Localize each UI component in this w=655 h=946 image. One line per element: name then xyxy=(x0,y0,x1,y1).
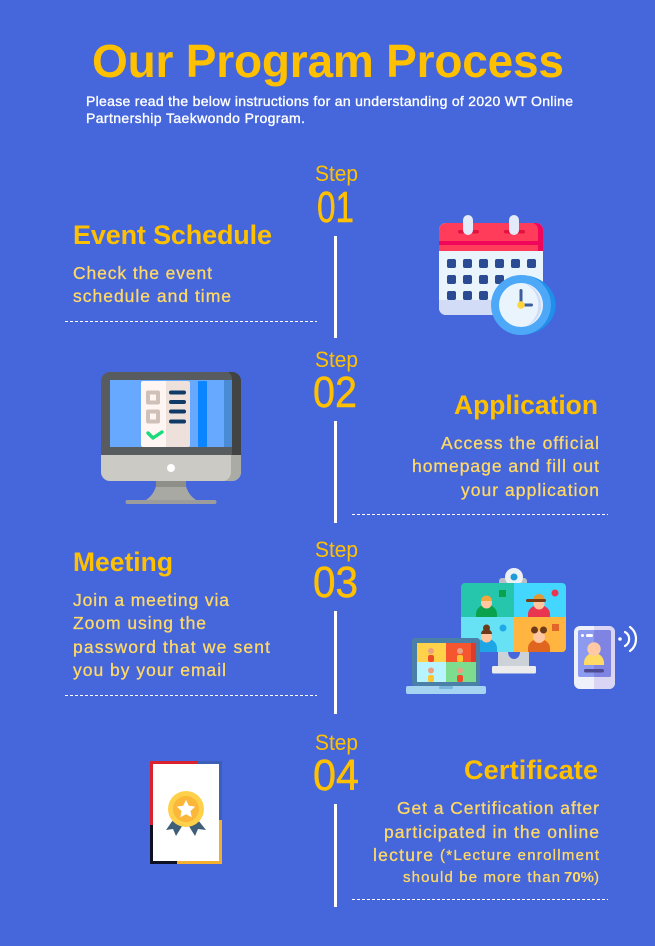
panel: event schedule: Check the event xyxy=(73,263,212,283)
step 02 marker: Step xyxy=(315,347,358,372)
panel: meeting xyxy=(65,547,317,696)
panel: certificate xyxy=(352,755,608,900)
step 01 marker: 01 xyxy=(317,183,354,232)
step 03 marker: Step xyxy=(315,537,358,562)
panel: certificate: ) xyxy=(594,869,599,886)
step 01 marker xyxy=(315,161,358,338)
step 01 marker: Step xyxy=(315,161,358,186)
intro text: Please read the below instructions for an understanding of 2020 WT Online xyxy=(86,93,573,109)
icon: calendar with clock xyxy=(439,215,556,335)
step 02 marker xyxy=(313,347,358,523)
step 04 marker: Step xyxy=(315,730,358,755)
title: Our Program Process xyxy=(92,35,564,87)
panel: meeting: Meeting xyxy=(73,547,173,577)
step 02 marker: 02 xyxy=(313,368,357,417)
panel: event schedule xyxy=(65,220,317,322)
panel: meeting: Zoom using the xyxy=(73,613,206,633)
panel: application xyxy=(352,390,608,514)
panel: application: Access the official xyxy=(441,433,599,453)
step 04 marker xyxy=(313,730,359,907)
panel: certificate: Get a Certification after xyxy=(397,798,599,818)
panel: certificate: Certificate xyxy=(464,755,598,785)
panel: certificate: should be more than xyxy=(403,869,560,886)
panel: event schedule: schedule and time xyxy=(73,286,231,306)
step 04 marker: 04 xyxy=(313,751,359,800)
panel: certificate: 70% xyxy=(564,869,594,886)
icon: certificate with medal xyxy=(150,761,222,864)
panel: meeting: you by your email xyxy=(73,660,226,680)
panel: application: your application xyxy=(461,480,599,500)
panel: certificate: participated in the online xyxy=(384,822,599,842)
panel: certificate: (*Lecture enrollment xyxy=(440,847,600,864)
panel: certificate: lecture xyxy=(373,845,433,865)
step 03 marker xyxy=(313,537,358,714)
icon: video meeting devices xyxy=(406,568,636,694)
intro text xyxy=(86,93,573,126)
intro text: Partnership Taekwondo Program. xyxy=(86,110,305,126)
panel: application: homepage and fill out xyxy=(412,456,599,476)
step 03 marker: 03 xyxy=(313,558,358,607)
panel: application: Application xyxy=(454,390,598,420)
panel: meeting: password that we sent xyxy=(73,637,270,657)
icon: desktop monitor with form xyxy=(101,372,241,504)
panel: meeting: Join a meeting via xyxy=(73,590,229,610)
panel: event schedule: Event Schedule xyxy=(73,220,272,250)
